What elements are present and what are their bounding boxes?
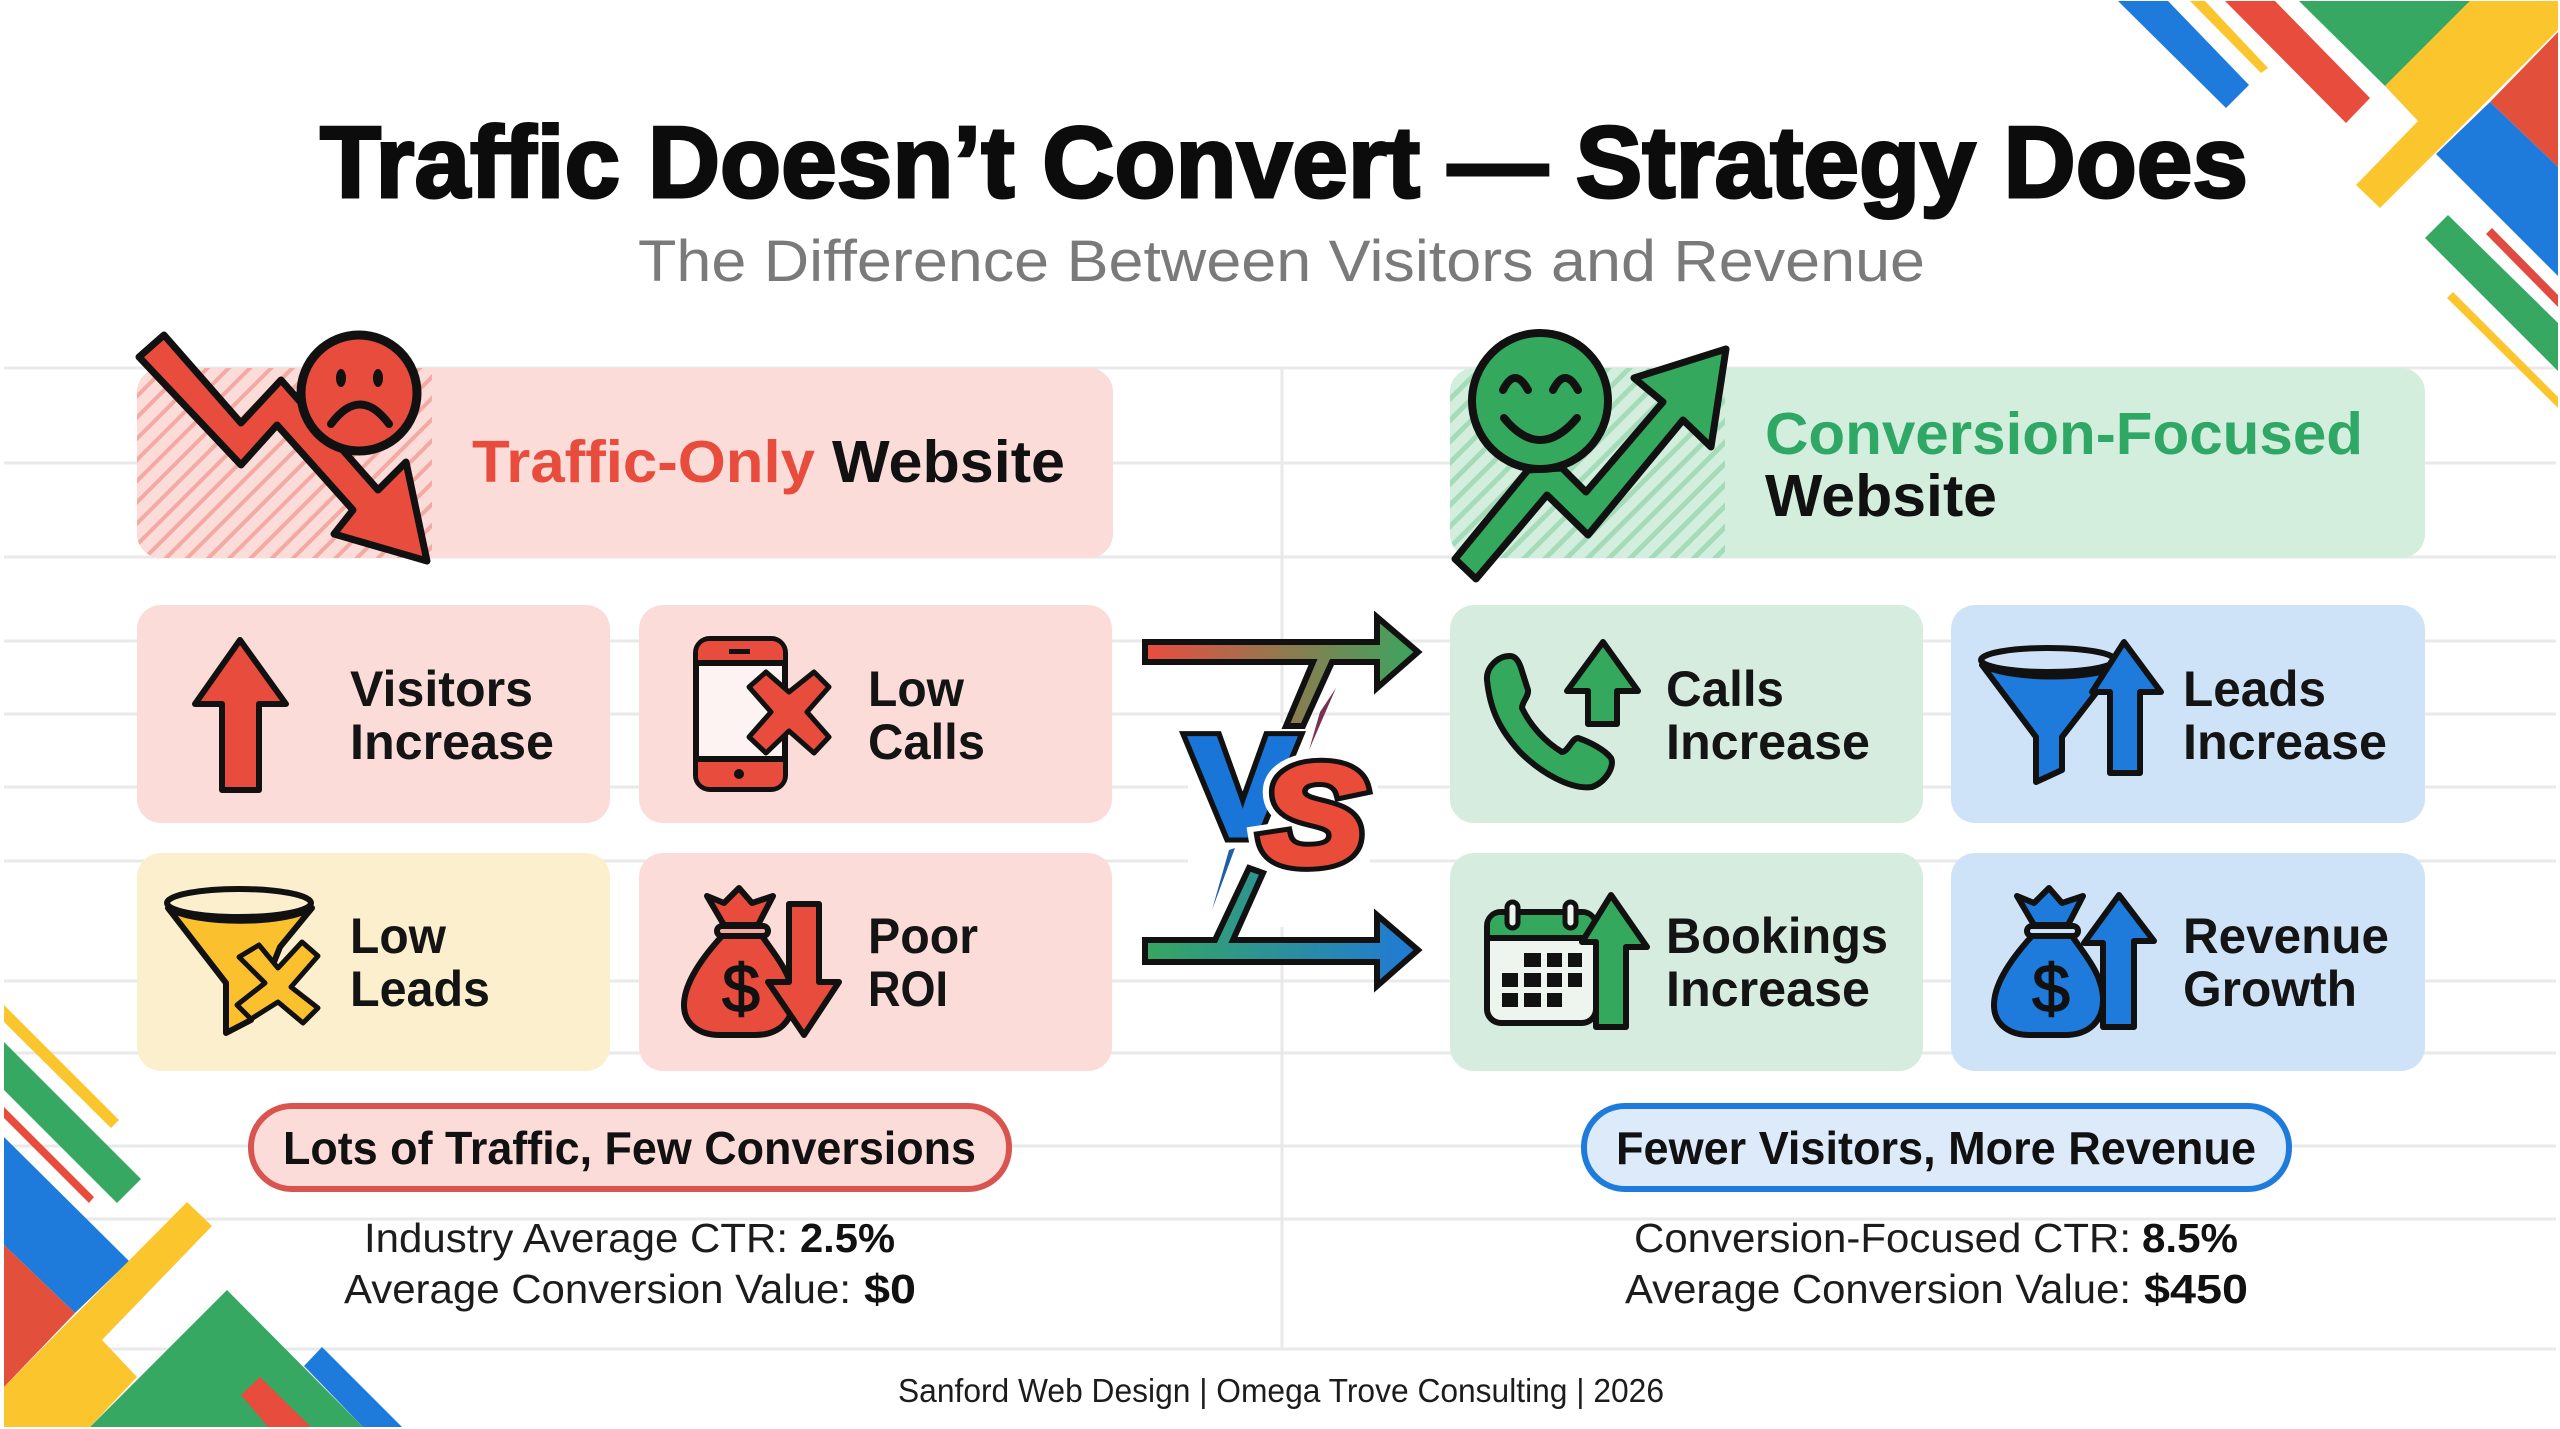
icon: phone with X (696, 639, 829, 789)
label (1666, 661, 1870, 770)
heading: conversion-focused website: Conversion-Focused (1765, 401, 2363, 467)
heading: conversion-focused website (1765, 401, 2363, 529)
icon: rising arrow (1455, 349, 1726, 579)
icon: calendar with up arrow (1487, 895, 1647, 1027)
stats: conversion-focused: Conversion-Focused CTR: (1634, 1215, 2131, 1261)
panel: conversion-focused header (1450, 333, 2425, 579)
vs letters: V (1190, 708, 1295, 865)
card: bookings increase (1450, 853, 1923, 1071)
label: Visitors (350, 661, 533, 717)
stats: conversion-focused: 8.5% (2142, 1215, 2238, 1261)
icon: funnel with up arrow (1981, 642, 2161, 782)
stats: traffic-only: Industry Average CTR: (364, 1215, 788, 1261)
decoration: top-right corner shapes (2118, 1, 2558, 408)
vs letters (1190, 708, 1365, 893)
callout: lots of traffic: Lots of Traffic, Few Conversions (283, 1122, 976, 1174)
label: ROI (868, 961, 948, 1017)
panel: traffic-only header (137, 335, 1113, 561)
label: Bookings (1666, 908, 1888, 964)
label: Low (868, 661, 964, 717)
label: Leads (350, 961, 490, 1017)
stats: conversion-focused: Average Conversion Value: (1625, 1266, 2131, 1312)
footer credit: Sanford Web Design | Omega Trove Consulting | 2026 (898, 1372, 1664, 1409)
vs letters: S (1261, 736, 1365, 893)
vs emblem with arrows (1145, 617, 1418, 986)
title: Traffic Doesn’t Convert — Strategy Does (320, 107, 2248, 219)
label (350, 661, 554, 770)
icon: up arrow (195, 640, 286, 790)
heading: traffic-only website (472, 429, 1065, 495)
card: low leads (137, 853, 610, 1071)
stats: traffic-only: Average Conversion Value: (344, 1266, 851, 1312)
stats: traffic-only: $0 (864, 1266, 916, 1312)
arrow: bottom, green to blue (1145, 868, 1418, 986)
icon: money bag with up arrow: $ (2032, 951, 2070, 1027)
heading: traffic-only website: Website (832, 429, 1065, 495)
label: Revenue (2183, 908, 2389, 964)
vs letters: S (1261, 736, 1365, 893)
icon: money bag with down arrow: $ (722, 951, 760, 1027)
card: leads increase (1951, 605, 2425, 823)
label: Low (350, 908, 446, 964)
icon: happy face (1472, 333, 1608, 469)
stats: traffic-only: 2.5% (800, 1215, 895, 1261)
heading: conversion-focused website: Website (1765, 463, 1997, 529)
icon: funnel with X (167, 889, 318, 1033)
icon: falling arrow (139, 335, 427, 561)
heading: traffic-only website: Traffic-Only (472, 429, 815, 495)
label (350, 908, 490, 1017)
stats: conversion-focused (1625, 1215, 2248, 1312)
label (868, 661, 985, 770)
label: Increase (1666, 961, 1870, 1017)
icon: money bag with down arrow (684, 888, 839, 1035)
label (868, 908, 978, 1017)
callout: fewer visitors: Fewer Visitors, More Revenue (1616, 1122, 2256, 1174)
stats: conversion-focused: $450 (2144, 1266, 2248, 1312)
card: revenue growth (1951, 853, 2425, 1071)
label: Increase (350, 714, 554, 770)
label (1666, 908, 1888, 1017)
subtitle: The Difference Between Visitors and Revenue (638, 229, 1925, 294)
card: low calls (639, 605, 1112, 823)
label: Calls (1666, 661, 1784, 717)
label: Leads (2183, 661, 2326, 717)
card: calls increase (1450, 605, 1923, 823)
stats: traffic-only (344, 1215, 916, 1312)
label: Calls (868, 714, 985, 770)
label: Poor (868, 908, 978, 964)
label: Increase (2183, 714, 2387, 770)
label (2183, 908, 2389, 1017)
callout: lots of traffic (251, 1106, 1009, 1189)
label: Growth (2183, 961, 2357, 1017)
label (2183, 661, 2387, 770)
arrow: top, red to green (1145, 617, 1418, 726)
vs letters: V (1190, 708, 1295, 865)
icon: phone handset with up arrow (1487, 642, 1638, 787)
card: poor roi (639, 853, 1112, 1071)
callout: fewer visitors (1584, 1106, 2289, 1189)
decoration: bottom-left corner shapes (4, 1005, 402, 1427)
label: Increase (1666, 714, 1870, 770)
vs letters: S (1261, 736, 1365, 893)
icon: money bag with up arrow (1994, 888, 2154, 1035)
card: visitors increase (137, 605, 610, 823)
icon: sad face (301, 335, 417, 451)
